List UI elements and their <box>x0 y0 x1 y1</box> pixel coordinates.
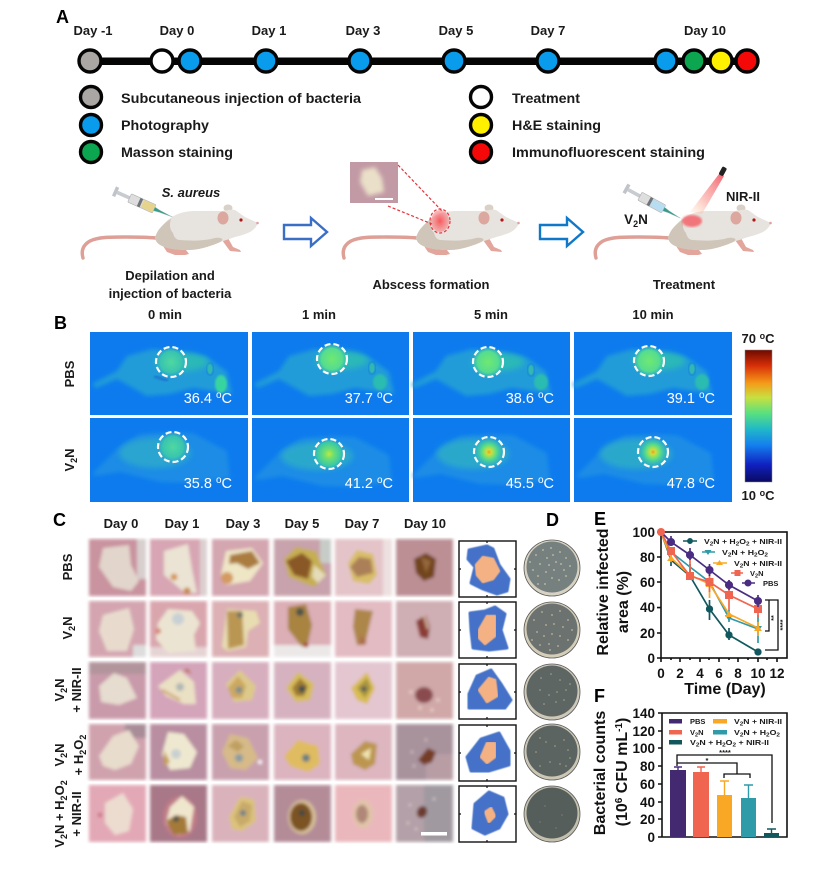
legend: Immunofluorescent staining <box>512 145 705 160</box>
axis labels: 40 <box>640 600 655 615</box>
dish PBS <box>524 540 580 596</box>
axis labels: 20 <box>640 626 655 641</box>
axis labels: 60 <box>640 777 655 792</box>
thermal PBS 0 min: C <box>222 391 232 407</box>
legend: 2 <box>696 742 699 748</box>
thermal PBS 5 min: 38.6 <box>506 391 534 407</box>
mouse 2 with abscess <box>343 162 520 292</box>
day labels: Day 10 <box>684 23 726 38</box>
row labels: O <box>52 785 67 795</box>
panel D: petri dishes <box>524 510 580 842</box>
legend: N <box>698 728 704 737</box>
legend: 2 <box>710 542 713 548</box>
colour bar <box>742 331 775 503</box>
legend: Photography <box>121 118 210 133</box>
legend <box>669 717 782 748</box>
y axis title: -1 <box>614 723 625 732</box>
legend: + NIR-II <box>736 738 769 747</box>
thermal V2N 0 min: o <box>216 475 222 486</box>
legend: V <box>690 728 695 737</box>
thermal V2N 1 min <box>252 418 409 502</box>
colour bar: o <box>760 488 766 498</box>
thermal V2N 5 min: o <box>538 475 544 486</box>
row labels: 2 <box>59 688 69 693</box>
abscess spot <box>431 210 449 232</box>
x axis title: Time (Day) <box>684 681 766 698</box>
row labels: 2 <box>59 753 69 758</box>
axis labels: 0 <box>657 666 665 681</box>
panel A: timeline and scheme <box>56 7 772 301</box>
caption <box>109 268 232 301</box>
thermal PBS 10 min: 39.1 <box>667 391 695 407</box>
legend: N + H <box>743 728 766 737</box>
day labels: Day 7 <box>345 516 379 531</box>
heading C: C <box>53 510 66 530</box>
photos NIR row <box>89 662 453 719</box>
day labels: Day 1 <box>252 23 286 38</box>
panel C: wound photos <box>52 510 516 848</box>
thermal PBS 0 min: 36.4 <box>184 391 212 407</box>
thermal PBS 5 min: o <box>538 390 544 401</box>
axis labels <box>632 706 655 845</box>
arrow 2 <box>540 218 583 246</box>
heated spot <box>682 215 702 227</box>
row labels: V <box>52 839 67 848</box>
series: combo <box>661 532 761 655</box>
thermal PBS 1 min: C <box>383 391 393 407</box>
day labels: Day 3 <box>346 23 380 38</box>
legend: PBS <box>690 717 705 726</box>
day labels: Day 0 <box>160 23 194 38</box>
axis labels: 100 <box>632 741 655 756</box>
legend: O <box>758 548 765 557</box>
legend: O <box>770 728 777 737</box>
row labels: V <box>52 693 67 702</box>
row labels: 2 <box>78 735 88 740</box>
row labels: 2 <box>67 626 77 631</box>
row labels <box>52 553 88 848</box>
day labels: Day -1 <box>73 23 113 38</box>
dish V2N <box>524 602 580 658</box>
series: PBS <box>661 532 761 607</box>
panel B: thermal images <box>54 307 775 503</box>
significance brackets <box>765 600 787 650</box>
legend: 2 <box>740 564 743 570</box>
row labels: PBS <box>60 553 75 580</box>
start marker <box>657 528 665 536</box>
V2N label: N <box>638 212 648 227</box>
legend <box>683 537 782 588</box>
legend: Subcutaneous injection of bacteria <box>121 91 362 106</box>
row labels: + NIR-II <box>69 791 84 837</box>
caption: injection of bacteria <box>109 286 232 301</box>
V2N label: 2 <box>633 219 638 229</box>
day labels: Day 5 <box>285 516 319 531</box>
legend: 2 <box>776 732 780 738</box>
thermal V2N 1 min: C <box>383 476 393 492</box>
series: V2N <box>661 532 762 618</box>
axis labels: 60 <box>640 575 655 590</box>
y axis title <box>595 528 632 656</box>
y axis title: Relative infected <box>595 528 612 656</box>
axis labels: 0 <box>647 651 655 666</box>
column labels <box>148 307 674 322</box>
axis labels: 20 <box>640 812 655 827</box>
legend: N + H <box>713 537 736 546</box>
axis labels: 8 <box>734 666 742 681</box>
legend: V <box>734 717 739 726</box>
legend: 2 <box>728 552 731 558</box>
day labels: Day 10 <box>404 516 446 531</box>
dish combo <box>524 786 580 842</box>
row labels: 2 <box>59 834 69 839</box>
legend: O <box>739 537 746 546</box>
row labels: O <box>71 740 86 750</box>
y axis title: 6 <box>614 797 625 803</box>
thermal PBS 5 min <box>411 332 570 415</box>
dish H2O2 <box>524 724 580 780</box>
thermal PBS 0 min <box>90 332 248 415</box>
row labels: + NIR-II <box>69 667 84 713</box>
day labels: Day 3 <box>226 516 260 531</box>
thermal V2N 10 min <box>574 418 732 502</box>
y axis title <box>592 711 631 835</box>
legend: H&E staining <box>512 118 601 133</box>
laser beam <box>690 174 724 214</box>
photos V2N row <box>89 601 453 657</box>
y axis title: ) <box>614 718 631 723</box>
significance brackets: **** <box>719 748 731 757</box>
colour bar: C <box>765 331 775 346</box>
thermal PBS 1 min: 37.7 <box>345 391 373 407</box>
series: NIR <box>661 532 762 636</box>
photos combo row <box>89 785 453 842</box>
row label V2N: 2 <box>69 458 79 463</box>
legend: N + NIR-II <box>743 717 782 726</box>
axis labels <box>632 525 785 681</box>
legend: N + H <box>731 548 754 557</box>
heading D: D <box>546 510 559 530</box>
heading E: E <box>594 509 606 529</box>
day labels: Day 1 <box>165 516 199 531</box>
y axis title: Bacterial counts <box>592 711 609 835</box>
bars <box>670 767 779 837</box>
legend: V <box>750 569 755 578</box>
photos PBS row <box>89 539 453 596</box>
legend <box>80 86 705 162</box>
legend: 2 <box>754 552 758 558</box>
axis labels: 12 <box>769 666 785 681</box>
timeline <box>79 50 758 72</box>
row label V2N: N <box>62 448 77 458</box>
y axis title: area (%) <box>615 571 632 633</box>
thermal PBS 1 min <box>252 332 409 415</box>
thermal V2N 5 min <box>412 418 570 502</box>
legend: N + NIR-II <box>743 559 782 568</box>
axis labels: 2 <box>676 666 684 681</box>
legend: 2 <box>740 732 743 738</box>
dashed callout <box>388 165 450 233</box>
legend: V <box>704 537 709 546</box>
thermal PBS 1 min: o <box>377 390 383 401</box>
legend: 2 <box>766 732 770 738</box>
NIR-II label: NIR-II <box>726 189 760 204</box>
row labels: 2 <box>59 795 69 800</box>
y axis title: (10 <box>614 803 631 826</box>
significance brackets: * <box>706 756 709 765</box>
significance brackets: ** <box>771 615 778 621</box>
thermal V2N 10 min: o <box>699 475 705 486</box>
heading A: A <box>56 7 69 27</box>
row labels: N <box>60 616 75 626</box>
legend: 2 <box>736 542 739 548</box>
axis labels: 120 <box>632 724 655 739</box>
heading F: F <box>594 686 605 706</box>
legend: 2 <box>764 552 768 558</box>
wound area plots <box>459 541 516 842</box>
colour bar: 10 <box>742 488 756 503</box>
day labels <box>73 23 726 38</box>
inset photo <box>350 162 398 203</box>
row labels: N <box>52 678 67 688</box>
row labels: V <box>60 631 75 640</box>
thermal PBS 5 min: C <box>544 391 554 407</box>
legend: 2 <box>695 732 698 738</box>
heading B: B <box>54 313 67 333</box>
day labels <box>104 516 446 531</box>
thermal V2N 1 min: o <box>377 475 383 486</box>
axis labels: 140 <box>632 706 655 721</box>
axis labels: 80 <box>640 550 655 565</box>
thermal V2N 5 min: C <box>544 476 554 492</box>
photos H2O2 row <box>89 724 453 780</box>
column labels: 5 min <box>474 307 508 322</box>
icon: syringe <box>112 186 175 222</box>
thermal V2N 10 min: 47.8 <box>667 476 695 492</box>
legend: + NIR-II <box>750 537 782 546</box>
day labels: Day 5 <box>439 23 473 38</box>
legend: N + H <box>699 738 722 747</box>
legend: 2 <box>740 722 743 728</box>
arrow 1 <box>284 218 327 246</box>
V2N label: V <box>624 212 633 227</box>
colour bar: C <box>765 488 775 503</box>
caption: Treatment <box>653 277 716 292</box>
axis labels: 6 <box>715 666 723 681</box>
series: H2O2 <box>661 532 762 643</box>
legend: Masson staining <box>121 145 233 160</box>
thermal V2N 1 min: 41.2 <box>345 476 373 492</box>
caption: Abscess formation <box>372 277 490 292</box>
thermal PBS 10 min: C <box>705 391 715 407</box>
axes <box>658 713 787 837</box>
thermal V2N 0 min <box>90 418 248 502</box>
legend: N <box>758 569 764 578</box>
S. aureus label: S. aureus <box>162 185 220 200</box>
day labels: Day 0 <box>104 516 138 531</box>
caption: Depilation and <box>125 268 215 283</box>
axis labels: 40 <box>640 795 655 810</box>
legend: V <box>690 738 695 747</box>
mouse 3 with treatment <box>595 166 772 292</box>
colour bar: 70 <box>742 331 756 346</box>
significance brackets: **** <box>780 619 787 630</box>
legend: 2 <box>722 742 726 748</box>
row label PBS: PBS <box>62 360 77 387</box>
legend: V <box>734 728 739 737</box>
thermal V2N 0 min: 35.8 <box>184 476 212 492</box>
column labels: 0 min <box>148 307 182 322</box>
thermal V2N 5 min: 45.5 <box>506 476 534 492</box>
significance brackets <box>677 748 772 823</box>
scale bar <box>421 832 447 836</box>
panel E: infected area line chart <box>594 509 787 698</box>
thermal PBS 10 min: o <box>699 390 705 401</box>
y axis title: CFU mL <box>614 732 631 798</box>
legend: Treatment <box>512 91 581 106</box>
axis labels: 0 <box>647 830 655 845</box>
legend: PBS <box>763 579 778 588</box>
icon: syringe <box>623 184 683 223</box>
row label V2N: V <box>62 463 77 472</box>
legend: V <box>734 559 739 568</box>
row labels: 2 <box>78 750 88 755</box>
legend: 2 <box>746 542 750 548</box>
thermal V2N 0 min: C <box>222 476 232 492</box>
dish NIR <box>524 664 580 720</box>
icon: laser head <box>718 166 727 176</box>
axis labels: 10 <box>750 666 766 681</box>
day labels: Day 7 <box>531 23 565 38</box>
thermal PBS 0 min: o <box>216 390 222 401</box>
axis labels: 4 <box>696 666 704 681</box>
legend: 2 <box>755 574 758 580</box>
axes <box>657 532 787 662</box>
panel F: bacterial counts bar chart <box>592 686 787 845</box>
legend: O <box>726 738 733 747</box>
legend: 2 <box>733 742 736 748</box>
row labels: V <box>52 758 67 767</box>
row labels: N <box>52 743 67 753</box>
thermal PBS 10 min <box>572 332 732 415</box>
axis labels: 80 <box>640 759 655 774</box>
row labels: + H <box>71 755 86 775</box>
thermal V2N 10 min: C <box>705 476 715 492</box>
row labels: 2 <box>59 780 69 785</box>
legend: V <box>722 548 727 557</box>
mouse 1 with syringe <box>82 185 259 301</box>
axis labels: 100 <box>632 525 655 540</box>
column labels: 1 min <box>302 307 336 322</box>
column labels: 10 min <box>632 307 674 322</box>
row labels: N + H <box>52 800 67 834</box>
colour bar: o <box>760 331 766 341</box>
